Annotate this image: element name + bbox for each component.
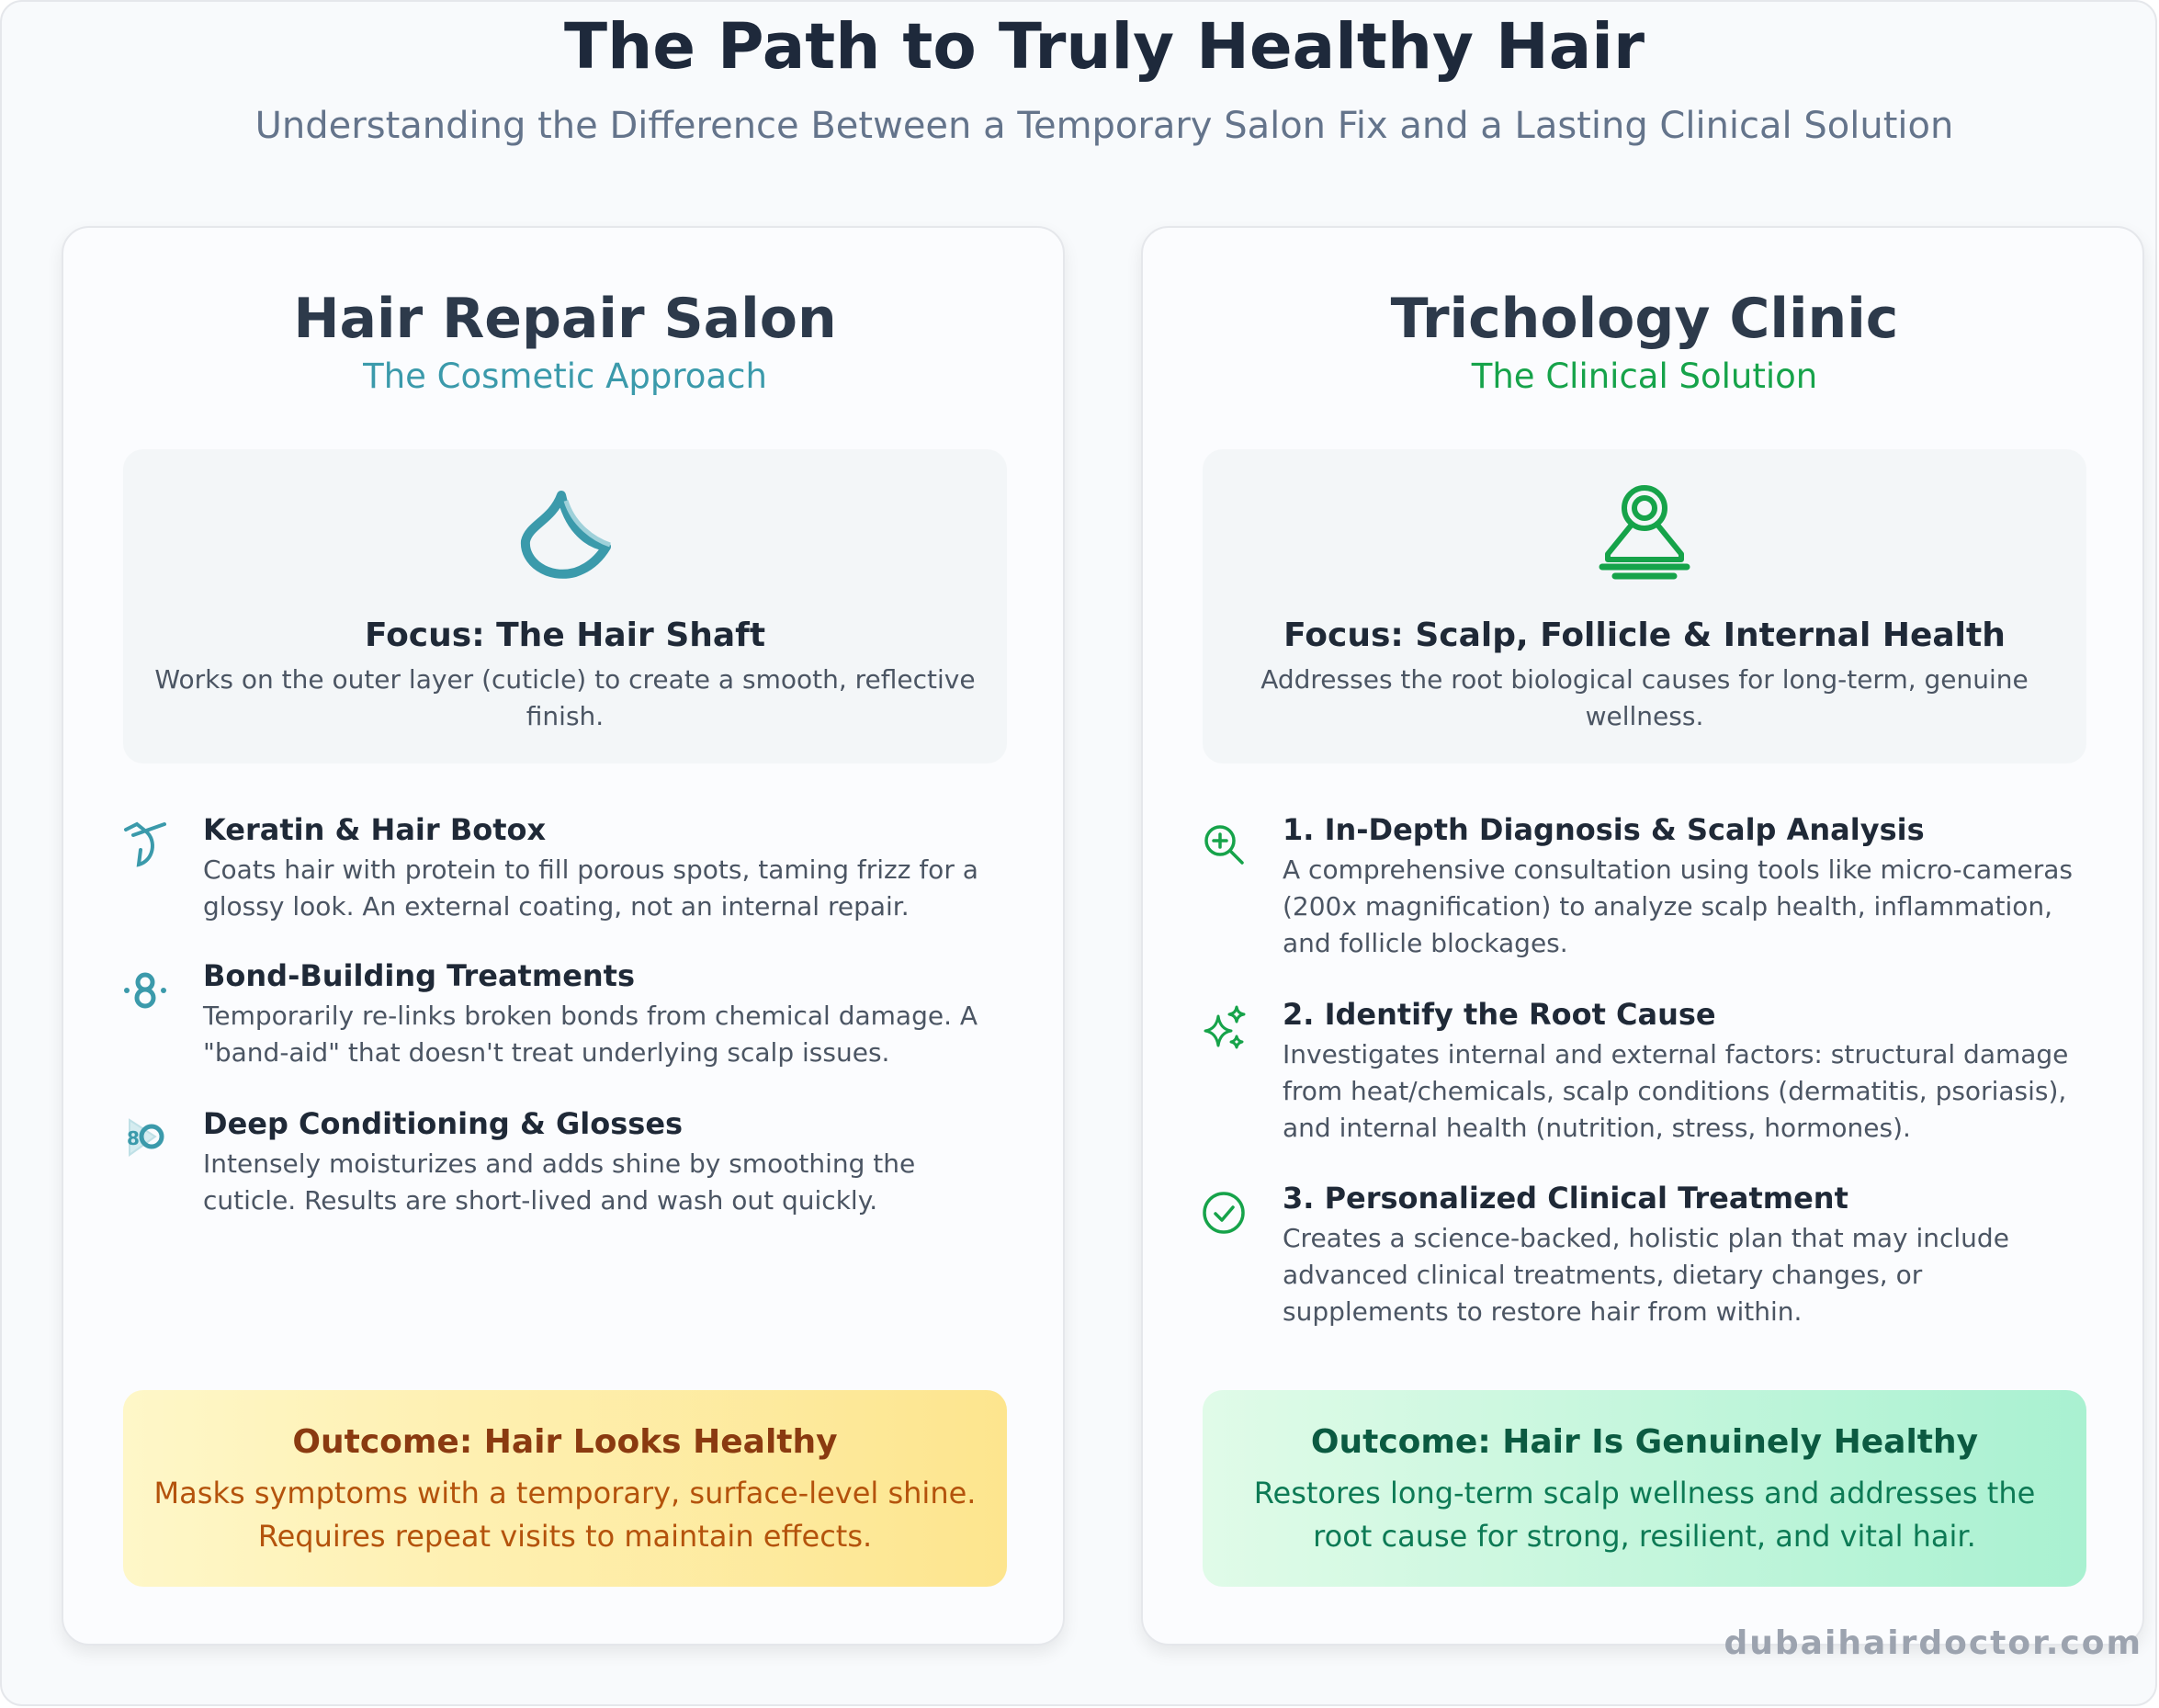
item: root cause: Investigates internal and external factors: structural damage — [1283, 1039, 2068, 1069]
item: bond building — [124, 958, 978, 1068]
item: bond building: "band-aid" that doesn't treat underlying scalp issues. — [203, 1037, 889, 1068]
panel: trichology clinic — [1141, 226, 2144, 1646]
item: deep conditioning: cuticle. Results are short-lived and wash out quickly. — [203, 1185, 877, 1216]
item: diagnosis: A comprehensive consultation using tools like micro-cameras — [1283, 854, 2073, 885]
focus description: wellness. — [1586, 701, 1703, 731]
item: root cause: and internal health (nutrition, stress, hormones). — [1283, 1113, 1911, 1143]
item: keratin: glossy look. An external coating, not an internal repair. — [203, 891, 910, 922]
focus heading: Focus: The Hair Shaft — [365, 616, 765, 654]
item: treatment — [1203, 1181, 2009, 1327]
icon: hair shaft — [520, 491, 611, 579]
item: diagnosis — [1204, 812, 2073, 958]
outcome: genuinely healthy: root cause for strong, resilient, and vital hair. — [1313, 1519, 1976, 1554]
icon: conditioning — [127, 1118, 164, 1157]
icon: magnifier — [1204, 825, 1244, 865]
outcome: genuinely healthy — [1203, 1390, 2086, 1587]
item: treatment: supplements to restore hair from within. — [1283, 1296, 1802, 1327]
focus description: finish. — [526, 701, 604, 731]
focus box: scalp — [1203, 449, 2086, 764]
outcome: looks healthy — [123, 1390, 1007, 1587]
focus description: Works on the outer layer (cuticle) to create a smooth, reflective — [154, 664, 976, 695]
focus heading: Focus: Scalp, Follicle & Internal Health — [1283, 616, 2006, 654]
icon: keratin — [123, 821, 167, 867]
item: keratin — [123, 812, 978, 922]
icon: conditioning: 8 — [127, 1127, 140, 1149]
subtitle: Understanding the Difference Between a Temporary Salon Fix and a Lasting Clinical Solution — [255, 105, 1953, 147]
item: treatment: 3. Personalized Clinical Treatment — [1283, 1181, 1848, 1216]
focus description — [1260, 664, 2029, 731]
item: bond building: Temporarily re-links broken bonds from chemical damage. A — [203, 1001, 978, 1031]
item: deep conditioning: Intensely moisturizes and adds shine by smoothing the — [203, 1148, 915, 1179]
item: root cause: from heat/chemicals, scalp conditions (dermatitis, psoriasis), — [1283, 1076, 2066, 1106]
focus box: hair shaft — [123, 449, 1007, 764]
item: bond building: Bond-Building Treatments — [203, 958, 635, 993]
item: deep conditioning: Deep Conditioning & Glosses — [203, 1106, 683, 1141]
outcome: looks healthy: Requires repeat visits to maintain effects. — [258, 1519, 872, 1554]
card heading: salon: Hair Repair Salon — [293, 287, 837, 351]
icon: sparkles — [1204, 1005, 1246, 1049]
item: treatment: Creates a science-backed, holistic plan that may include — [1283, 1223, 2009, 1253]
item: deep conditioning — [127, 1106, 915, 1216]
watermark: dubaihairdoctor.com — [1724, 1624, 2142, 1662]
outcome: looks healthy: Outcome: Hair Looks Healthy — [292, 1423, 838, 1461]
icon: check circle — [1203, 1192, 1245, 1234]
icon: microscope/scalp — [1599, 485, 1690, 579]
card heading: clinic: Trichology Clinic — [1391, 287, 1898, 351]
focus description — [154, 664, 976, 731]
item: keratin: Keratin & Hair Botox — [203, 812, 546, 847]
card subheading: cosmetic approach: The Cosmetic Approach — [363, 356, 767, 396]
item: root cause — [1204, 997, 2068, 1143]
item: treatment: advanced clinical treatments, dietary changes, or — [1283, 1260, 1922, 1290]
title: The Path to Truly Healthy Hair — [564, 10, 1645, 84]
item: diagnosis: 1. In-Depth Diagnosis & Scalp Analysis — [1283, 812, 1925, 847]
focus description: Addresses the root biological causes for long-term, genuine — [1260, 664, 2029, 695]
item: diagnosis: and follicle blockages. — [1283, 928, 1568, 958]
card subheading: clinical solution: The Clinical Solution — [1472, 356, 1817, 396]
icon: bond — [124, 972, 166, 1009]
item: keratin: Coats hair with protein to fill porous spots, taming frizz for a — [203, 854, 978, 885]
outcome: genuinely healthy: Outcome: Hair Is Genuinely Healthy — [1311, 1423, 1978, 1461]
outcome: genuinely healthy: Restores long-term scalp wellness and addresses the — [1254, 1476, 2035, 1510]
outcome: looks healthy: Masks symptoms with a temporary, surface-level shine. — [154, 1476, 976, 1510]
item: diagnosis: (200x magnification) to analyze scalp health, inflammation, — [1283, 891, 2052, 922]
panel: hair repair salon — [62, 226, 1065, 1646]
item: root cause: 2. Identify the Root Cause — [1283, 997, 1716, 1032]
